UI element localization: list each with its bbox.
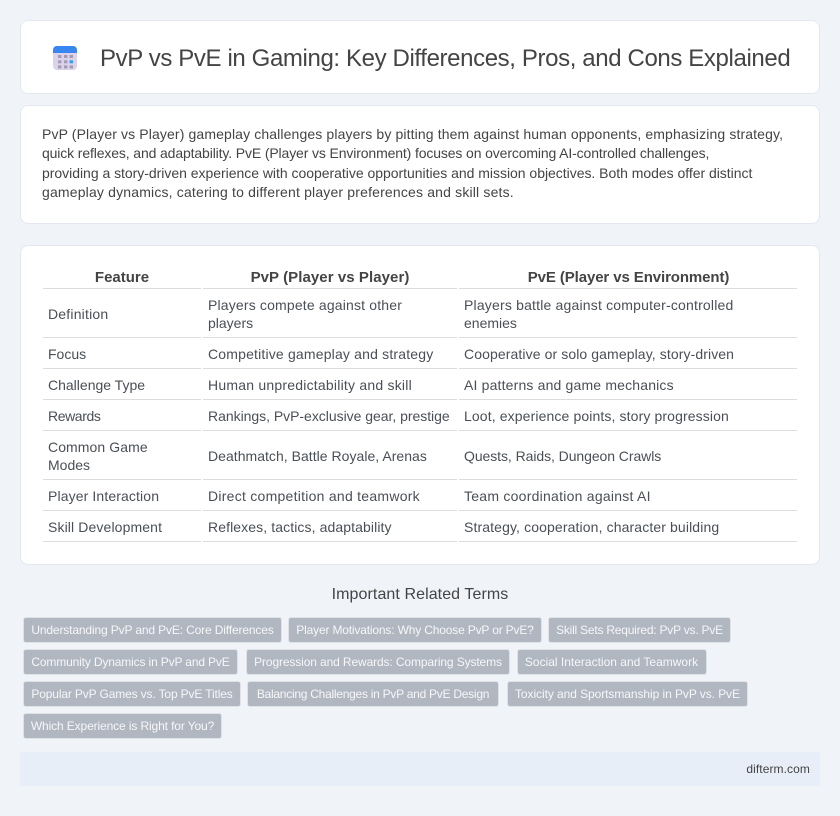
row: rewards (48, 408, 729, 424)
tag: Community Dynamics in PvP and PvE (31, 655, 230, 669)
panel: comparison table (20, 245, 820, 565)
row: definition: players (208, 315, 253, 331)
tag: Popular PvP Games vs. Top PvE Titles (31, 687, 233, 701)
tag: Understanding PvP and PvE: Core Differences (31, 623, 274, 637)
column headers: Feature (95, 269, 149, 286)
row: rewards: Rankings, PvP-exclusive gear, prestige (208, 408, 450, 424)
tag (23, 649, 238, 675)
row: focus: Cooperative or solo gameplay, story-driven (464, 346, 734, 362)
row: challenge type: Challenge Type (48, 377, 145, 393)
row: rewards: Rewards (48, 408, 100, 424)
row: player interaction: Team coordination against AI (464, 488, 651, 504)
column headers: PvE (Player vs Environment) (528, 269, 729, 286)
footer (20, 752, 820, 786)
row: focus (48, 346, 734, 362)
row: definition (48, 297, 733, 331)
row: definition: Players compete against other (208, 297, 402, 313)
row: player interaction: Direct competition and teamwork (208, 488, 420, 504)
row: common game modes: Quests, Raids, Dungeon Crawls (464, 448, 661, 464)
tag: Skill Sets Required: PvP vs. PvE (556, 623, 723, 637)
tag: Social Interaction and Teamwork (525, 655, 698, 669)
tag (23, 713, 222, 739)
row: focus: Focus (48, 346, 86, 362)
title: PvP vs PvE in Gaming: Key Differences, Pros, and Cons Explained (100, 45, 790, 72)
tag (548, 617, 731, 643)
comparison table (43, 269, 797, 542)
tag (23, 617, 282, 643)
heading: important related terms: Important Related Terms (332, 586, 508, 603)
row: definition: Players battle against computer-controlled (464, 297, 733, 313)
tag (247, 681, 499, 707)
row: skill development: Reflexes, tactics, adaptability (208, 519, 392, 535)
row: common game modes: Deathmatch, Battle Royale, Arenas (208, 448, 427, 464)
tag: Player Motivations: Why Choose PvP or PvE? (296, 623, 534, 637)
row: challenge type: AI patterns and game mechanics (464, 377, 674, 393)
tag (507, 681, 748, 707)
row: common game modes: Common Game (48, 439, 148, 455)
row: skill development (48, 519, 719, 535)
row lines (43, 288, 797, 542)
tag: Toxicity and Sportsmanship in PvP vs. PvE (515, 687, 740, 701)
row: skill development: Strategy, cooperation, character building (464, 519, 719, 535)
tag (516, 649, 706, 675)
tag: Progression and Rewards: Comparing Systems (254, 655, 502, 669)
row: challenge type: Human unpredictability and skill (208, 377, 412, 393)
intro text: gameplay dynamics, catering to different player preferences and skill sets. (42, 184, 514, 200)
intro text: PvP (Player vs Player) gameplay challenges players by pitting them against human opponents, emphasizing strategy, (42, 126, 783, 142)
row: common game modes: Modes (48, 457, 90, 473)
panel: introduction (20, 105, 820, 224)
intro text: providing a story-driven experience with cooperative opportunities and mission objectives. Both modes offer distinct (42, 165, 752, 181)
row: definition: enemies (464, 315, 517, 331)
related term tags (23, 617, 748, 739)
footer: site name: difterm.com (746, 762, 810, 776)
tag: Which Experience is Right for You? (31, 719, 214, 733)
tag (246, 649, 510, 675)
intro text (42, 126, 783, 200)
icon: calendar (53, 46, 77, 70)
row: skill development: Skill Development (48, 519, 162, 535)
row: player interaction: Player Interaction (48, 488, 159, 504)
row: focus: Competitive gameplay and strategy (208, 346, 433, 362)
column headers: PvP (Player vs Player) (251, 269, 409, 286)
row: challenge type (48, 377, 674, 393)
row: player interaction (48, 488, 651, 504)
tag (288, 617, 542, 643)
panel: header (20, 20, 820, 94)
intro text: quick reflexes, and adaptability. PvE (Player vs Environment) focuses on overcoming AI-controlled challenges, (42, 145, 709, 161)
row: definition: Definition (48, 306, 108, 322)
tag (23, 681, 241, 707)
row: common game modes (48, 439, 661, 473)
column headers (95, 269, 729, 286)
tag: Balancing Challenges in PvP and PvE Design (257, 687, 489, 701)
row: rewards: Loot, experience points, story progression (464, 408, 729, 424)
